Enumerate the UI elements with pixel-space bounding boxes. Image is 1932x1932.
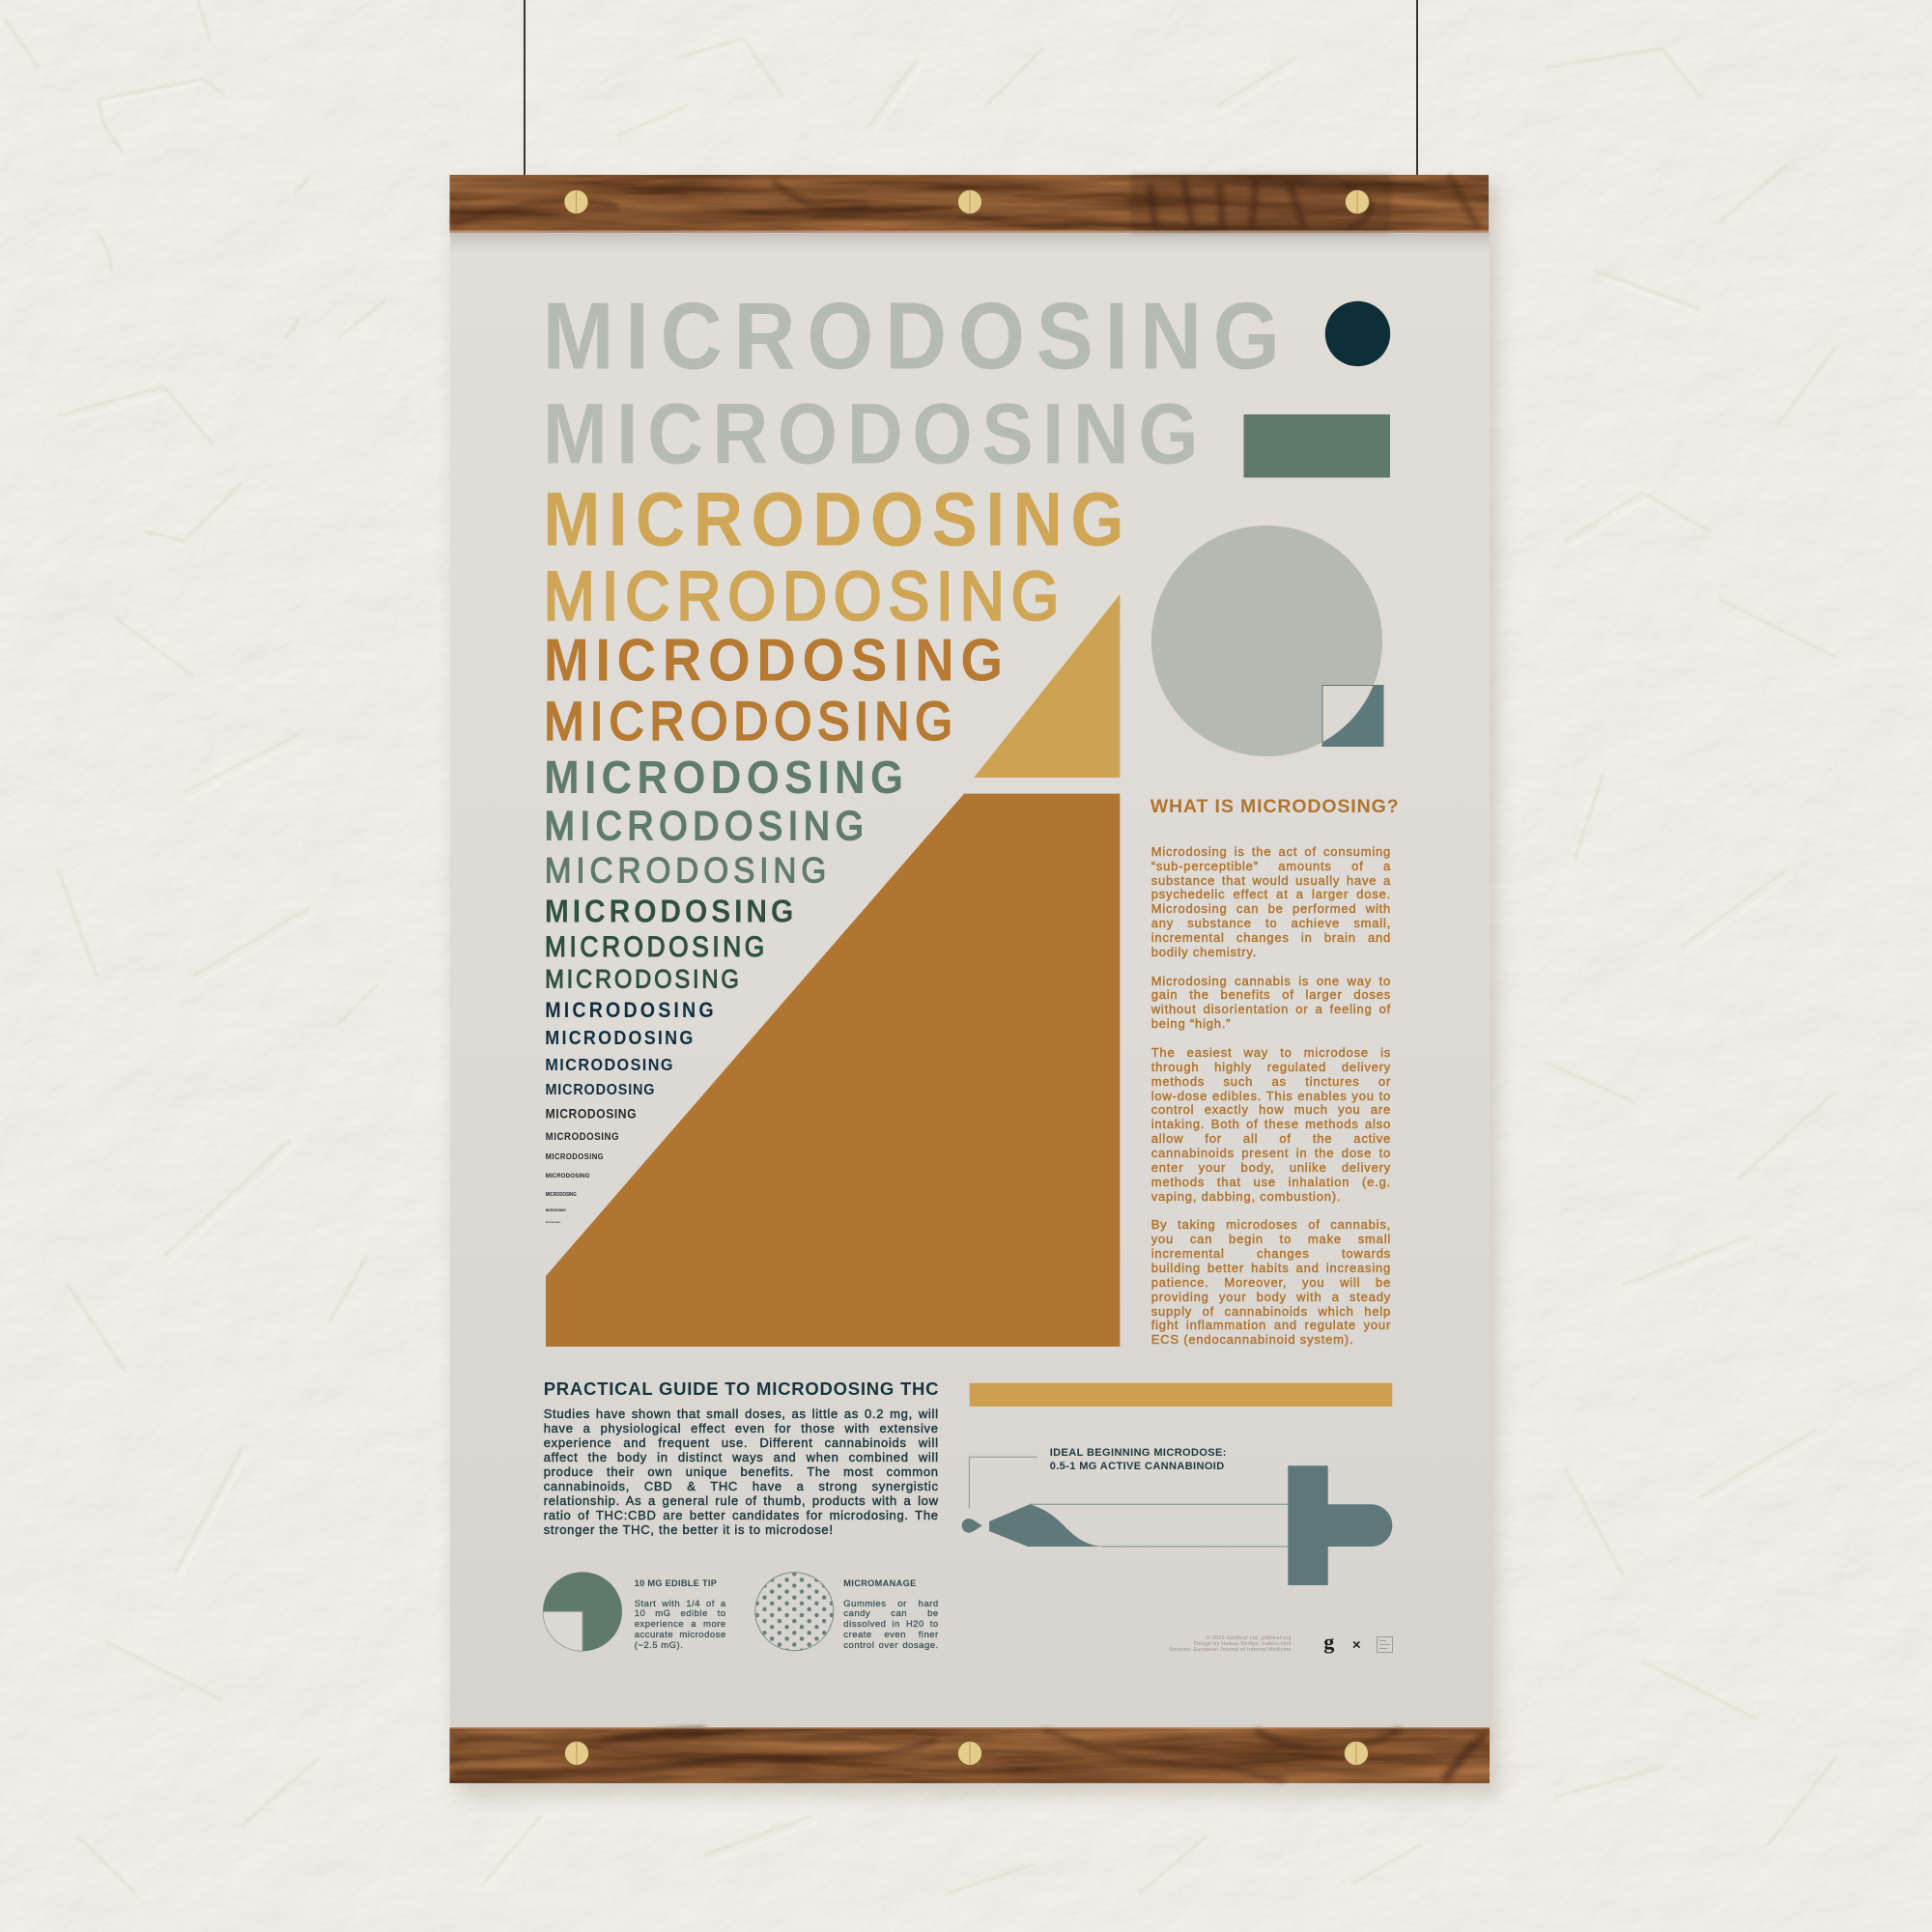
text block: benefits bbox=[1151, 1217, 1391, 1347]
text block: microdosing cannabis: Microdosing cannabis is one way to bbox=[1151, 974, 1391, 988]
headline stack: descending MICRODOSING: MICRODOSING bbox=[545, 999, 714, 1022]
text block: edible tip: (~2.5 mG). bbox=[635, 1640, 683, 1651]
text block: benefits: providing your body with a steady bbox=[1151, 1290, 1391, 1304]
heading: practical guide: PRACTICAL GUIDE TO MICRODOSING THC bbox=[544, 1378, 939, 1399]
text block: benefits: you can begin to make small bbox=[1151, 1232, 1391, 1246]
text block: edible tip: accurate microdose bbox=[635, 1630, 726, 1640]
text block: practical guide: ratio of THC:CBD are better candidates for microdosing. The bbox=[544, 1508, 939, 1522]
text block: delivery methods: enter your body, unlike delivery bbox=[1151, 1160, 1391, 1175]
text block: practical guide: relationship. As a general rule of thumb, products with a low bbox=[544, 1493, 939, 1508]
headline stack: descending MICRODOSING: MICRODOSING bbox=[546, 1106, 637, 1121]
text block: edible tip: 10 mG edible to bbox=[635, 1608, 726, 1619]
headline stack: descending MICRODOSING: MICRODOSING bbox=[543, 282, 1280, 389]
heading: what is microdosing: WHAT IS MICRODOSING? bbox=[1151, 796, 1399, 817]
poster paper bbox=[450, 233, 1490, 1727]
large orange trapezoid bbox=[546, 794, 1120, 1347]
text block: practical guide: cannabinoids, CBD & THC have a strong synergistic bbox=[544, 1479, 939, 1493]
text block: delivery methods bbox=[1151, 1045, 1391, 1204]
text block: benefits: By taking microdoses of cannabis, bbox=[1151, 1217, 1391, 1232]
text block: benefits: supply of cannabinoids which help bbox=[1151, 1304, 1391, 1319]
text block: delivery methods: intaking. Both of these methods also bbox=[1151, 1117, 1391, 1131]
text block: definition: incremental changes in brain and bbox=[1151, 930, 1391, 945]
headline stack: descending MICRODOSING: MICRODOSING bbox=[544, 626, 1003, 694]
text block: microdosing cannabis: without disorientation or a feeling of bbox=[1151, 1002, 1391, 1016]
text block: benefits: fight inflammation and regulate your bbox=[1151, 1318, 1391, 1332]
headline stack: descending MICRODOSING: MICRODOSING bbox=[545, 851, 826, 891]
text block: benefits: ECS (endocannabinoid system). bbox=[1151, 1332, 1353, 1347]
text block: delivery methods: allow for all of the active bbox=[1151, 1131, 1391, 1146]
icon: edible quarter circle bbox=[543, 1572, 622, 1651]
headline stack: descending MICRODOSING: MICRODOSING bbox=[545, 804, 864, 848]
dropper collar bbox=[1288, 1465, 1328, 1585]
text block: practical guide: have a physiological effect even for those with extensive bbox=[544, 1421, 939, 1435]
dropper liquid bbox=[989, 1504, 1106, 1547]
logo: square bbox=[1378, 1636, 1393, 1652]
text block: definition: psychedelic effect at a larger dose. bbox=[1151, 887, 1391, 901]
headline stack: descending MICRODOSING: MICRODOSING bbox=[543, 385, 1199, 481]
text block: edible tip: experience a more bbox=[635, 1619, 726, 1630]
text block: delivery methods: control exactly how much you are bbox=[1151, 1102, 1391, 1117]
text block: edible tip bbox=[635, 1599, 726, 1651]
headline stack: descending MICRODOSING: MICRODOSING bbox=[545, 931, 764, 962]
headline stack: descending MICRODOSING: MICRODOSING bbox=[546, 1222, 560, 1224]
text block: delivery methods: methods that use inhalation (e.g. bbox=[1151, 1175, 1391, 1189]
text block: definition: Microdosing can be performed with bbox=[1151, 901, 1391, 916]
text block: micromanage: Gummies or hard bbox=[843, 1599, 939, 1609]
text block: delivery methods: vaping, dabbing, combustion). bbox=[1151, 1189, 1341, 1204]
text block: delivery methods: The easiest way to microdose is bbox=[1151, 1045, 1391, 1060]
text block: practical guide: affect the body in distinct ways and when combined will bbox=[544, 1450, 939, 1464]
text block: delivery methods: methods such as tinctures or bbox=[1151, 1074, 1391, 1089]
label: 10 mg edible tip: 10 MG EDIBLE TIP bbox=[635, 1578, 717, 1588]
dropper diagram bbox=[962, 1457, 1392, 1585]
headline stack: descending MICRODOSING: MICRODOSING bbox=[544, 692, 952, 752]
text block: edible tip: Start with 1/4 of a bbox=[635, 1599, 726, 1609]
footer credits bbox=[1169, 1635, 1292, 1653]
text block: delivery methods: cannabinoids present in the dose to bbox=[1151, 1146, 1391, 1160]
bottom wooden hanger bbox=[450, 1727, 1490, 1783]
dropper bulb bbox=[1327, 1504, 1392, 1547]
text block: practical guide: produce their own unique benefits. The most common bbox=[544, 1464, 939, 1479]
headline stack: descending MICRODOSING: MICRODOSING bbox=[546, 1192, 577, 1198]
text block: microdosing cannabis: gain the benefits of larger doses bbox=[1151, 987, 1391, 1002]
headline stack: descending MICRODOSING: MICRODOSING bbox=[545, 965, 739, 994]
label: micromanage: MICROMANAGE bbox=[843, 1578, 917, 1588]
gold bar bbox=[970, 1383, 1392, 1406]
text block: benefits: incremental changes towards bbox=[1151, 1246, 1391, 1261]
text block: definition: Microdosing is the act of consuming bbox=[1151, 844, 1391, 859]
headline stack: descending MICRODOSING: MICRODOSING bbox=[546, 1152, 604, 1161]
gold triangle bbox=[974, 594, 1120, 778]
headline stack: descending MICRODOSING: MICRODOSING bbox=[545, 1081, 654, 1098]
logo: times mark: × bbox=[1352, 1636, 1361, 1654]
headline stack: descending MICRODOSING: MICRODOSING bbox=[546, 1132, 619, 1143]
text block: micromanage: dissolved in H20 to bbox=[843, 1619, 939, 1630]
large grey circle with corner square bbox=[1151, 526, 1383, 756]
text block: practical guide bbox=[543, 1406, 939, 1537]
footer credits: © 2019 Goldleaf Ltd, goldleaf.org bbox=[1207, 1635, 1292, 1641]
headline stack: descending MICRODOSING: MICRODOSING bbox=[545, 1055, 672, 1074]
callout: ideal beginning microdose: 0.5-1 MG ACTIVE CANNABINOID bbox=[1050, 1461, 1225, 1472]
text block: definition: any substance to achieve small, bbox=[1151, 916, 1391, 930]
text block: benefits: patience. Moreover, you will be bbox=[1151, 1275, 1391, 1290]
callout: ideal beginning microdose bbox=[1050, 1447, 1227, 1472]
headline stack: descending MICRODOSING: MICRODOSING bbox=[545, 893, 793, 929]
text block: micromanage: control over dosage. bbox=[843, 1640, 939, 1651]
text block: delivery methods: low-dose edibles. This enables you to bbox=[1151, 1089, 1391, 1103]
footer credits: Sources: European Journal of Internal Medicine bbox=[1169, 1647, 1292, 1653]
dark circle bbox=[1325, 301, 1390, 366]
top wooden hanger bbox=[450, 175, 1489, 233]
callout: ideal beginning microdose: IDEAL BEGINNING MICRODOSE: bbox=[1050, 1447, 1227, 1459]
headline stack: descending MICRODOSING: MICRODOSING bbox=[544, 751, 903, 803]
text block: practical guide: experience and frequent use. Different cannabinoids will bbox=[544, 1435, 939, 1450]
drop bbox=[962, 1519, 982, 1533]
headline stack: descending MICRODOSING bbox=[543, 282, 1280, 1224]
text block: definition: “sub-perceptible” amounts of a bbox=[1151, 859, 1391, 873]
text block: benefits: building better habits and increasing bbox=[1151, 1261, 1391, 1275]
logo: g: g bbox=[1323, 1630, 1334, 1654]
icon: dotted circle bbox=[755, 1573, 834, 1651]
text block: microdosing cannabis: being “high.” bbox=[1151, 1016, 1231, 1031]
text block: definition bbox=[1151, 844, 1391, 959]
poster with shapes and headline stack bbox=[446, 172, 1504, 1802]
headline stack: descending MICRODOSING: MICRODOSING bbox=[543, 476, 1124, 561]
callout leader line bbox=[969, 1457, 1037, 1509]
text block: micromanage: create even finer bbox=[843, 1630, 939, 1640]
text block: definition: bodily chemistry. bbox=[1151, 945, 1257, 959]
text block: microdosing cannabis bbox=[1151, 974, 1391, 1031]
dropper tube bbox=[1030, 1504, 1289, 1547]
headline stack: descending MICRODOSING: MICRODOSING bbox=[546, 1208, 566, 1212]
text block: practical guide: stronger the THC, the better it is to microdose! bbox=[544, 1522, 834, 1537]
headline stack: descending MICRODOSING: MICRODOSING bbox=[546, 1173, 589, 1179]
text block: practical guide: Studies have shown that small doses, as little as 0.2 mg, will bbox=[544, 1406, 939, 1421]
headline stack: descending MICRODOSING: MICRODOSING bbox=[545, 1028, 693, 1049]
text block: definition: substance that would usually have a bbox=[1151, 873, 1391, 887]
text block: micromanage bbox=[843, 1599, 939, 1651]
brass screws bbox=[564, 189, 1370, 1766]
text block: delivery methods: through highly regulated delivery bbox=[1151, 1060, 1391, 1074]
headline stack: descending MICRODOSING: MICRODOSING bbox=[544, 558, 1059, 635]
footer credits: Design by Haikuu Design, haikuu.com bbox=[1194, 1641, 1292, 1647]
text block: micromanage: candy can be bbox=[843, 1608, 939, 1619]
green rectangle bbox=[1244, 414, 1390, 477]
